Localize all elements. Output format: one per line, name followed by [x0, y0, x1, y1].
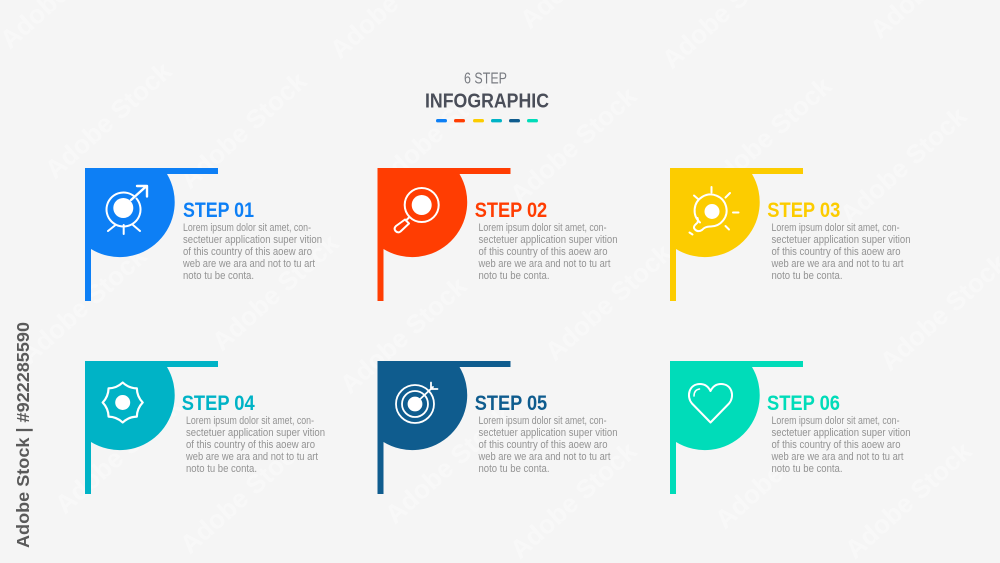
body text: Lorem ipsum dolor sit amet, con-	[772, 222, 900, 234]
body text: noto tu be conta.	[772, 463, 842, 475]
bracket shape	[85, 361, 218, 494]
body text: sectetuer application super vition	[186, 427, 325, 439]
bracket shape	[670, 361, 803, 494]
body text: noto tu be conta.	[772, 270, 842, 282]
heading: STEP 03	[767, 199, 840, 222]
body text: Lorem ipsum dolor sit amet, con-	[772, 415, 900, 427]
body text: noto tu be conta.	[186, 463, 257, 475]
title	[425, 70, 549, 122]
text: Adobe Stock	[709, 405, 848, 534]
title line: infographic: INFOGRAPHIC	[425, 90, 549, 112]
text: Adobe Stock	[334, 270, 473, 399]
heading: STEP 02	[475, 199, 547, 222]
body text	[478, 415, 618, 475]
icon: magnifier	[395, 188, 439, 232]
colour dashes	[436, 119, 538, 122]
heading: STEP 06	[767, 392, 840, 415]
body text: of this country of this aoew aro	[186, 439, 315, 451]
text: Adobe Stock	[699, 70, 838, 199]
text: Adobe Stock	[504, 80, 643, 209]
panel: step 05	[378, 361, 618, 494]
body text: sectetuer application super vition	[183, 234, 322, 246]
body text: sectetuer application super vition	[478, 234, 618, 246]
text: Adobe Stock	[379, 400, 518, 529]
bracket shape	[85, 168, 218, 301]
body text: noto tu be conta.	[183, 270, 254, 282]
bracket shape	[670, 168, 803, 301]
text: Adobe Stock	[14, 240, 153, 369]
text: Adobe Stock	[49, 390, 188, 519]
body text: web are we ara and not to tu art	[478, 451, 610, 463]
text: Adobe Stock	[206, 227, 345, 356]
icon: target with arrow	[396, 382, 438, 423]
icon: heart	[689, 384, 732, 422]
icon: male target	[107, 186, 147, 234]
body text: Lorem ipsum dolor sit amet, con-	[186, 415, 314, 427]
body text: web are we ara and not to tu art	[478, 258, 610, 270]
icon: gear badge	[103, 382, 143, 422]
panel: step 03	[670, 168, 910, 301]
body text: web are we ara and not to tu art	[771, 451, 904, 463]
bracket shape	[378, 361, 510, 494]
body text	[185, 415, 325, 475]
text: Adobe Stock	[504, 435, 643, 563]
text: Adobe Stock	[839, 435, 978, 563]
panel: step 01	[85, 168, 322, 301]
body text: of this country of this aoew aro	[183, 246, 312, 258]
body text: Lorem ipsum dolor sit amet, con-	[183, 222, 311, 234]
icon: light bulb	[690, 187, 738, 234]
body text: sectetuer application super vition	[772, 427, 910, 439]
text: Adobe Stock	[174, 65, 313, 194]
panel: step 04	[85, 361, 325, 494]
text: Adobe Stock	[174, 430, 313, 559]
panel: step 06	[670, 361, 910, 494]
body text	[182, 222, 322, 282]
text: Adobe Stock	[539, 237, 678, 366]
heading: STEP 05	[475, 392, 547, 415]
body text: web are we ara and not to tu art	[771, 258, 904, 270]
body text: of this country of this aoew aro	[478, 439, 608, 451]
stock id label: Adobe Stock | #922285590	[13, 322, 33, 548]
body text	[771, 222, 910, 282]
text: Adobe Stock	[834, 100, 973, 229]
bracket shape	[378, 168, 510, 301]
panel: step 02	[378, 168, 618, 301]
body text: Lorem ipsum dolor sit amet, con-	[478, 415, 607, 427]
body text: noto tu be conta.	[478, 463, 550, 475]
heading: STEP 01	[183, 199, 254, 222]
text: Adobe Stock	[369, 65, 508, 194]
body text: web are we ara and not to tu art	[185, 451, 318, 463]
body text: web are we ara and not to tu art	[182, 258, 315, 270]
body text: sectetuer application super vition	[772, 234, 910, 246]
body text: of this country of this aoew aro	[772, 246, 900, 258]
body text: sectetuer application super vition	[478, 427, 618, 439]
body text	[771, 415, 910, 475]
body text: noto tu be conta.	[478, 270, 550, 282]
body text: Lorem ipsum dolor sit amet, con-	[478, 222, 607, 234]
text: Adobe Stock	[39, 55, 178, 184]
title line: 6 step: 6 STEP	[464, 70, 507, 88]
body text	[478, 222, 618, 282]
body text: of this country of this aoew aro	[772, 439, 900, 451]
body text: of this country of this aoew aro	[478, 246, 608, 258]
heading: STEP 04	[182, 392, 255, 415]
